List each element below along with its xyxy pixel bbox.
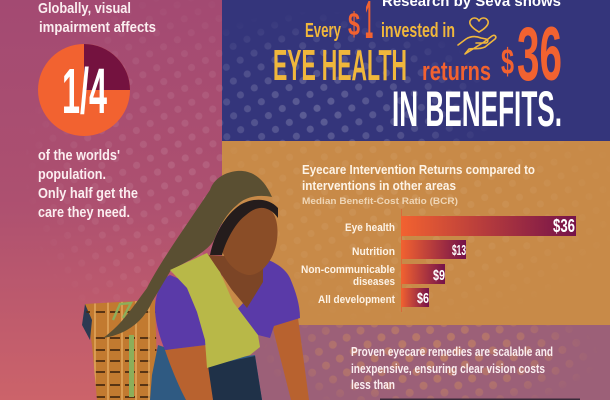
- purple blouse: [155, 258, 300, 350]
- bar: eye health: Eye health: [345, 222, 395, 234]
- head scarf: [103, 171, 272, 338]
- bar: non-communicable diseases: [301, 264, 445, 288]
- bar: non-communicable diseases: $9: [433, 267, 445, 284]
- bar: nutrition: [352, 240, 466, 259]
- bar chart: [301, 209, 576, 312]
- text: proven eyecare remedies: [351, 344, 553, 392]
- neck and chest: [208, 255, 263, 308]
- text: proven eyecare remedies: inexpensive, ensuring clear vision costs: [351, 361, 545, 376]
- blue skirt: [150, 345, 262, 400]
- bar: all development: $6: [417, 290, 429, 307]
- text: population statement: care they need.: [38, 204, 130, 221]
- headline: Every: [305, 20, 342, 42]
- bar: eye health: [345, 216, 576, 236]
- bar: nutrition: Nutrition: [352, 246, 395, 258]
- arms: [165, 345, 213, 400]
- face: [220, 206, 278, 275]
- bar: non-communicable diseases: Non-communicable: [301, 264, 395, 276]
- headline: $: [501, 41, 514, 82]
- basket: [80, 300, 160, 400]
- bar: all development: [318, 288, 429, 307]
- hair: [210, 200, 278, 255]
- panel: mauve remedies background: [222, 325, 610, 400]
- chart title: interventions in other areas: [302, 178, 456, 193]
- text: population statement: population.: [38, 166, 106, 183]
- headline: returns: [422, 56, 491, 86]
- headline: $: [348, 6, 360, 42]
- pie chart: one quarter: [38, 44, 130, 136]
- panel: navy headline background: [222, 0, 610, 141]
- panel: orange chart background: [222, 141, 610, 325]
- yellow shawl: [170, 253, 260, 368]
- text: population statement: [38, 147, 138, 221]
- bar: non-communicable diseases: diseases: [353, 276, 395, 288]
- text: population statement: of the worlds': [38, 147, 120, 164]
- headline: [273, 0, 562, 137]
- text: globally visual impairment: Globally, visual: [38, 0, 131, 17]
- headline: 36: [517, 12, 562, 97]
- chart title: [302, 162, 535, 207]
- headline: EYE HEALTH: [273, 41, 407, 90]
- bar: nutrition: $13: [452, 242, 466, 259]
- text: proven eyecare remedies: less than: [351, 377, 395, 392]
- headline: invested in: [381, 20, 455, 42]
- pie label: 1/4: [62, 55, 107, 127]
- text: globally visual impairment: [38, 0, 156, 36]
- dark skirt waist: [207, 356, 262, 400]
- bar: all development: All development: [318, 294, 395, 306]
- bar: eye health: $36: [553, 216, 575, 236]
- chart title: Median Benefit-Cost Ratio (BCR): [302, 196, 458, 207]
- panel: left magenta background: [0, 34, 222, 400]
- icon: hand holding heart: [458, 18, 496, 54]
- chart title: Eyecare Intervention Returns compared to: [302, 162, 535, 177]
- text: globally visual impairment: impairment affects: [39, 19, 156, 36]
- text: proven eyecare remedies: Proven eyecare remedies are scalable and: [351, 344, 553, 359]
- photo: woman with basket: [80, 171, 309, 400]
- text: population statement: Only half get the: [38, 185, 138, 202]
